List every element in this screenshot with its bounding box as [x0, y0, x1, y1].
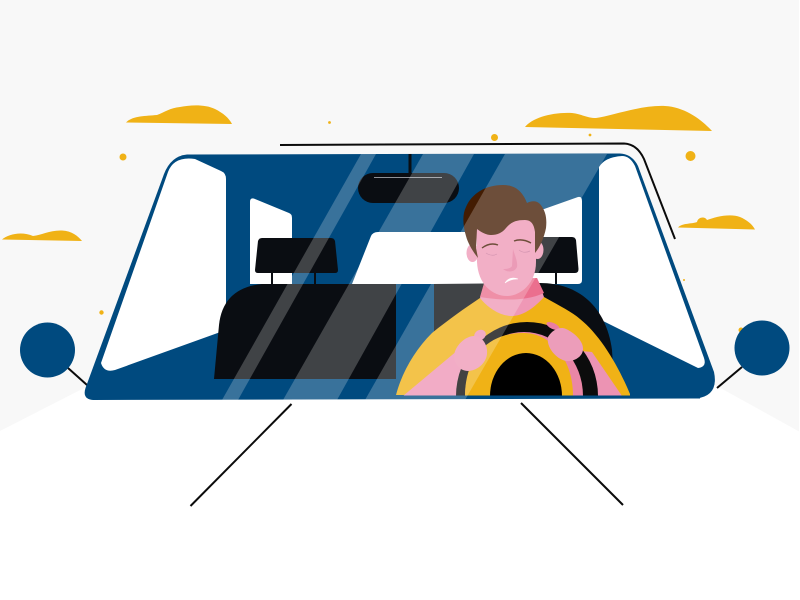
- mouth: [505, 278, 518, 283]
- driver headrest post: [555, 272, 557, 284]
- passenger headrest: [255, 238, 338, 273]
- right ear: [536, 242, 544, 259]
- shirt: [396, 297, 630, 396]
- neck shadow: [480, 278, 544, 300]
- left thumb: [474, 330, 486, 340]
- hair: [463, 185, 546, 258]
- cloud: right: [678, 215, 755, 230]
- driver seat: [434, 283, 615, 396]
- driver headrest: [530, 237, 578, 273]
- glass glare bands: [222, 154, 607, 400]
- glare band 3: [365, 154, 607, 400]
- roof outline line: [280, 144, 675, 239]
- road: [0, 385, 800, 600]
- rear window right: [530, 197, 582, 284]
- right mirror arm: [717, 367, 742, 388]
- passenger headrest posts: [271, 273, 316, 284]
- glare band 1: [222, 154, 376, 400]
- cloud: top left: [126, 105, 232, 124]
- rearview mirror highlight: [374, 176, 442, 178]
- left wheel line: [190, 404, 292, 506]
- left ear: [466, 245, 477, 262]
- left eyelid: [486, 253, 497, 255]
- neck: [480, 278, 544, 316]
- rearview mirror: [358, 173, 459, 203]
- windshield: [85, 154, 715, 400]
- decorative dots: [99, 121, 744, 332]
- right thumb: [546, 322, 560, 330]
- rearview mirror stem: [408, 154, 412, 174]
- windshield bottom sill: [380, 396, 700, 398]
- right hand: [548, 328, 583, 361]
- right eyebrow: [514, 240, 531, 243]
- driver: [396, 185, 630, 396]
- steering wheel yellow band: [465, 333, 573, 396]
- steering wheel rim: [456, 322, 598, 396]
- left mirror arm: [68, 368, 87, 385]
- steering wheel inner skin: [465, 332, 583, 396]
- steering wheel hub: [490, 353, 562, 396]
- left side mirror: [20, 322, 75, 378]
- windshield body: [85, 154, 715, 400]
- illustration: drowsy driver seen through windshield: [2, 105, 790, 507]
- right arm: [583, 351, 622, 396]
- cloud: far left: [2, 230, 82, 241]
- left arm: [404, 352, 461, 396]
- cloud: top right: [525, 106, 712, 131]
- nose: [503, 249, 517, 271]
- right side window: [599, 156, 705, 368]
- left side window: [101, 159, 226, 371]
- right eyelid: [519, 250, 530, 252]
- right side mirror: [734, 320, 790, 376]
- rear window center: [352, 232, 490, 284]
- glare band 2: [283, 154, 474, 400]
- right wheel line: [521, 403, 623, 505]
- rear window left: [250, 198, 292, 284]
- passenger seat: [214, 284, 396, 379]
- face: [476, 220, 536, 296]
- left eyebrow: [482, 244, 498, 248]
- left hand: [454, 336, 487, 371]
